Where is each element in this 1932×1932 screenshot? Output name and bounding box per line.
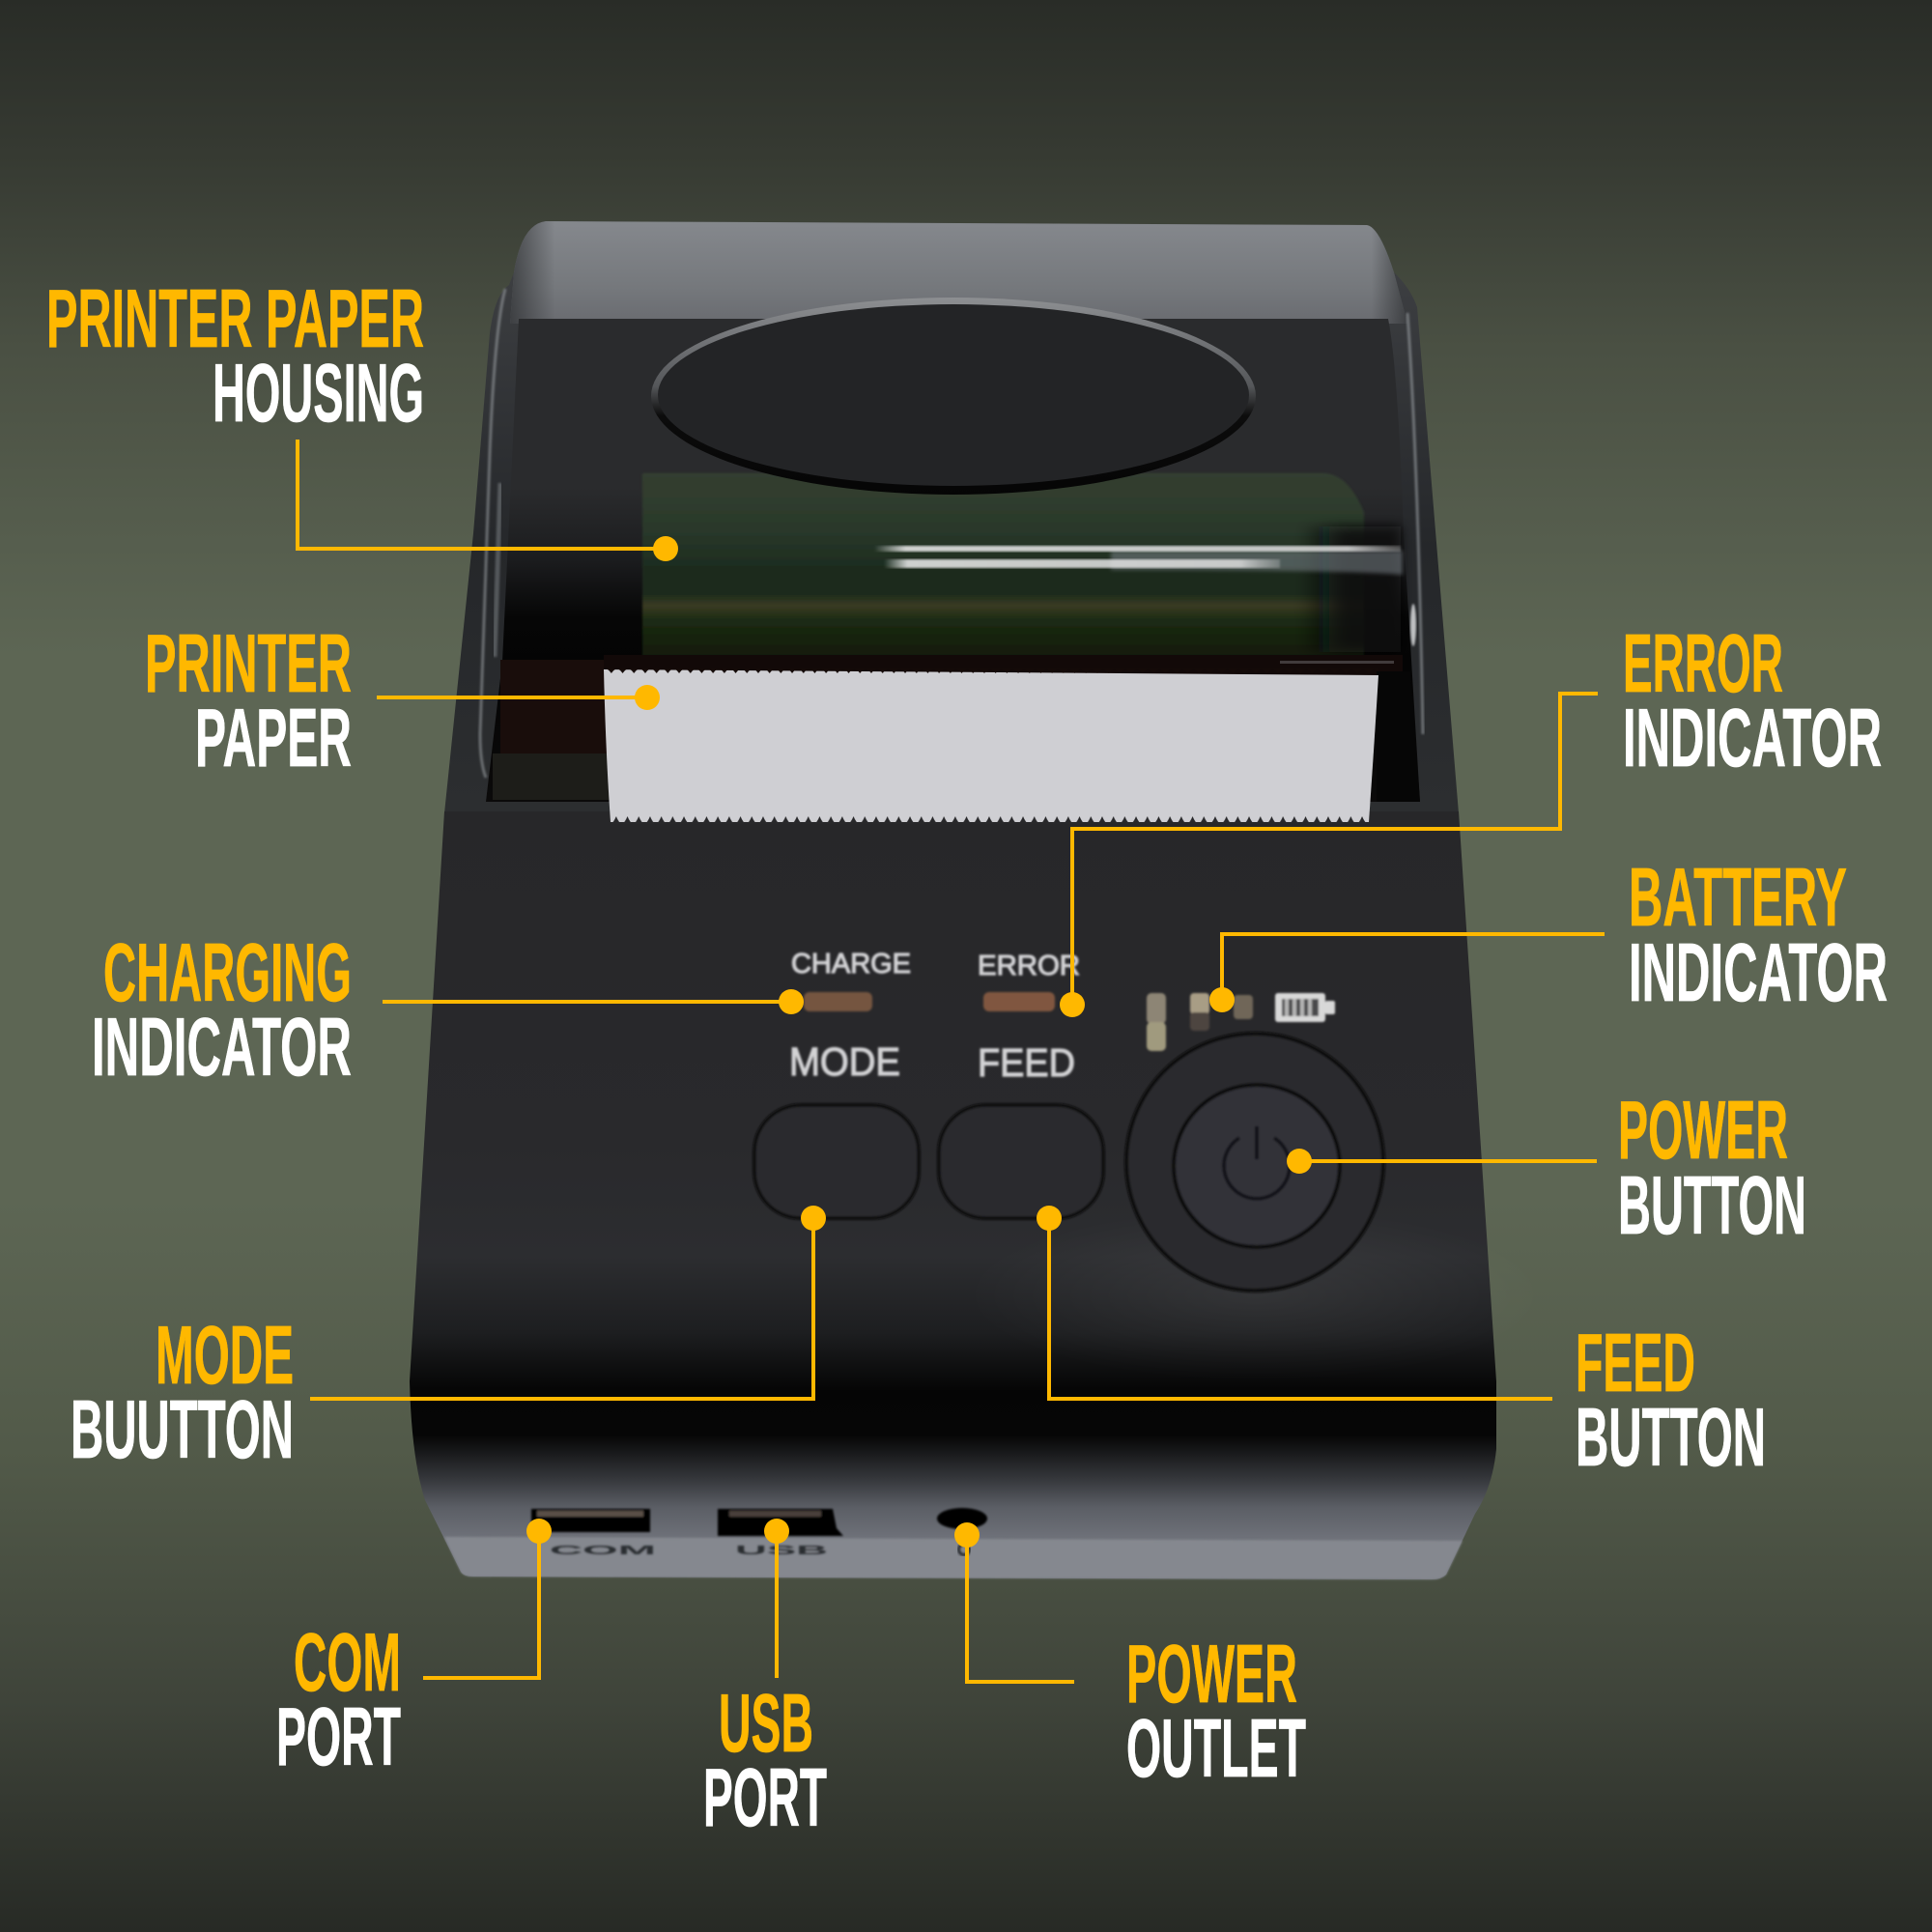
callout: printer paper [145,618,660,784]
callout: charging indicator: INDICATOR [92,1002,352,1094]
mode button [754,1105,919,1218]
callout: mode button: MODE [156,1310,294,1402]
callout: error indicator: ERROR [1623,618,1783,710]
callout: power button [1287,1085,1806,1252]
charge LED [804,992,872,1011]
paper strip [604,668,1378,824]
callout: printer paper: PAPER [195,693,352,784]
FEED label: FEED [978,1040,1075,1085]
USB port [718,1509,843,1536]
callout: COM port: COM [294,1617,401,1709]
callout: printer paper housing [46,273,678,561]
callout: charging indicator: CHARGING [103,927,352,1019]
error LED [983,992,1055,1011]
paper window [642,473,1403,657]
icon: power symbol [1224,1126,1290,1199]
callout: USB port [703,1519,827,1844]
base body [410,811,1496,1579]
CHARGE label: CHARGE [791,949,911,980]
printer illustration [410,221,1546,1579]
icon: battery [1275,993,1335,1022]
callout: feed button: BUTTON [1576,1392,1766,1484]
callout: printer paper: PRINTER [145,618,352,710]
power outlet hole [937,1508,987,1529]
black slot [604,655,1403,676]
power strip icon [958,1544,970,1555]
MODE label: MODE [789,1039,900,1084]
callout: feed button [1037,1206,1766,1484]
callout: power outlet: POWER [1126,1629,1297,1720]
callout: COM port: PORT [276,1691,401,1783]
bottom strip [444,1537,1463,1579]
right speckled slot [1377,671,1420,802]
callout: USB port: USB [719,1678,813,1770]
COM strip text: COM [550,1543,656,1557]
callout: battery indicator [1209,852,1888,1019]
callout: printer paper housing: HOUSING [213,348,424,440]
printer lid [444,221,1459,813]
callout: mode button: BUUTTON [71,1384,294,1476]
USB strip text: USB [735,1543,828,1557]
ERROR label: ERROR [978,951,1080,981]
callout: charging indicator [92,927,804,1094]
callout: mode button [71,1206,826,1476]
COM port [531,1509,650,1532]
callout: power button: POWER [1618,1085,1788,1177]
callout: power outlet: OUTLET [1126,1703,1306,1795]
callout: COM port [276,1519,552,1783]
callout: printer paper housing: PRINTER PAPER [46,273,424,365]
power button [1126,1034,1383,1291]
callout: power outlet [954,1522,1306,1795]
callout: error indicator [1060,618,1882,1017]
feed button [939,1105,1103,1218]
callout: USB port: PORT [703,1752,827,1844]
battery LEDs [1147,993,1253,1051]
base sheen [966,1208,1546,1381]
oval lid recess [651,298,1256,495]
callout: feed button: FEED [1576,1318,1695,1409]
